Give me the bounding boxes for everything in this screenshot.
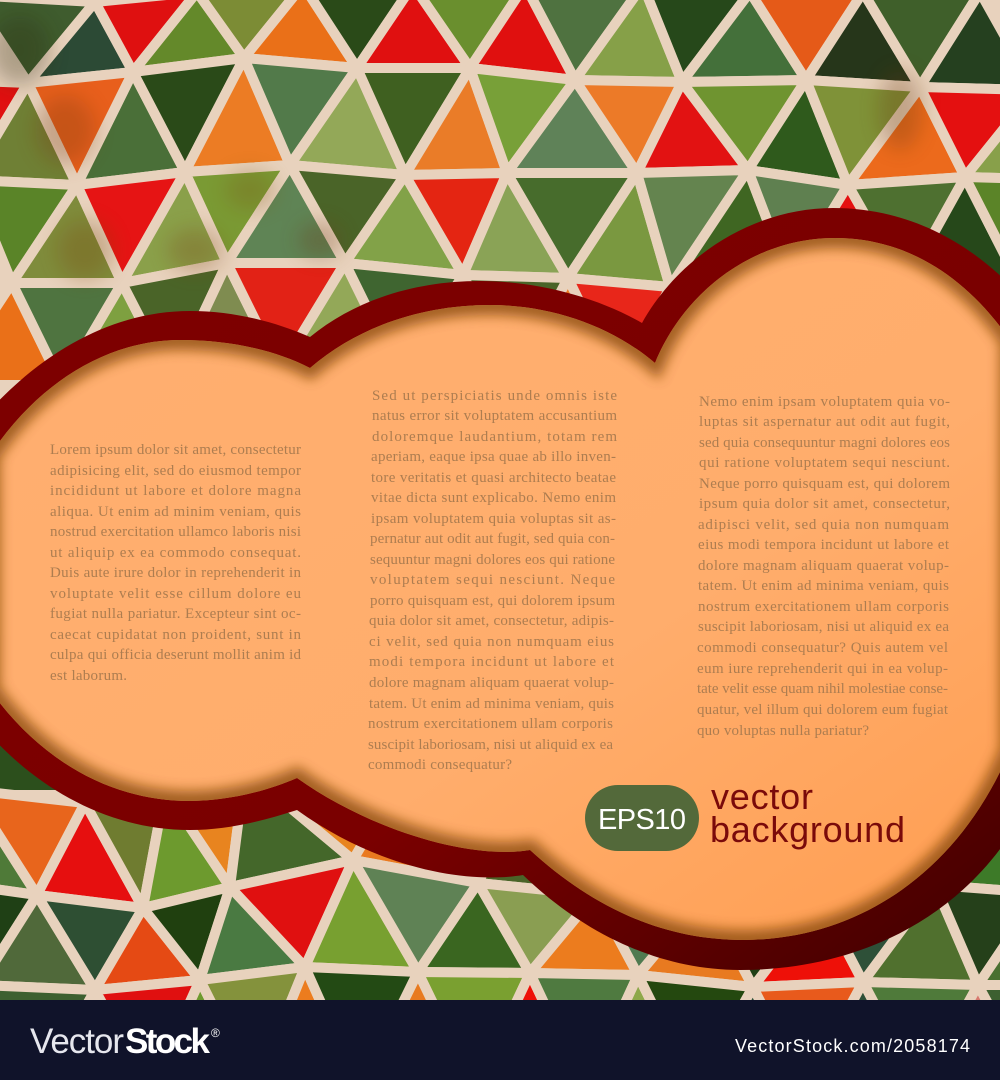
text block: right column: commodi consequatur? Quis autem vel bbox=[697, 640, 948, 656]
text block: right column: tatem. Ut enim ad minima veniam, quis bbox=[698, 578, 949, 594]
text block: middle column: commodi consequatur? bbox=[368, 757, 512, 773]
text block: left column: adipisicing elit, sed do eiusmod tempor bbox=[50, 463, 301, 479]
text block: middle column: doloremque laudantium, totam rem bbox=[372, 429, 617, 445]
text block: left column bbox=[50, 442, 302, 684]
text block: right column: nostrum exercitationem ullam corporis bbox=[698, 599, 949, 615]
text block: right column: quo voluptas nulla pariatur? bbox=[697, 723, 869, 739]
text block: middle column: natus error sit voluptatem accusantium bbox=[372, 408, 617, 424]
cloud panel: orange interior with inner shadow bbox=[0, 238, 1000, 940]
logo: VectorStock bbox=[30, 1022, 220, 1061]
text block: middle column: suscipit laboriosam, nisi ut aliquid ex ea bbox=[368, 737, 613, 753]
footer bar bbox=[0, 1000, 1000, 1080]
text block: middle column: tatem. Ut enim ad minima veniam, quis bbox=[369, 696, 614, 712]
text block: right column: Nemo enim ipsam voluptatem quia vo- bbox=[699, 394, 950, 410]
text block: middle column: nostrum exercitationem ullam corporis bbox=[368, 716, 613, 732]
text block: right column: suscipit laboriosam, nisi ut aliquid ex ea bbox=[698, 619, 949, 635]
text block: middle column: voluptatem sequi nesciunt. Neque bbox=[370, 572, 615, 588]
text block: middle column: porro quisquam est, qui dolorem ipsum bbox=[370, 593, 615, 609]
text block: left column: culpa qui officia deserunt mollit anim id bbox=[50, 647, 302, 663]
text block: right column: qui ratione voluptatem sequi nesciunt. bbox=[699, 455, 950, 471]
text block: left column: fugiat nulla pariatur. Excepteur sint oc- bbox=[50, 606, 301, 622]
text block: left column: ut aliquip ex ea commodo consequat. bbox=[50, 545, 301, 561]
text block: right column: dolore magnam aliquam quaerat volup- bbox=[698, 558, 949, 574]
text block: left column: incididunt ut labore et dolore magna bbox=[50, 483, 301, 499]
text block: right column: ipsum quia dolor sit amet, consectetur, bbox=[699, 496, 950, 512]
text block: middle column: quia dolor sit amet, consectetur, adipis- bbox=[369, 613, 614, 629]
text block: left column: voluptate velit esse cillum dolore eu bbox=[50, 586, 302, 602]
text block: left column: Lorem ipsum dolor sit amet, consectetur bbox=[50, 442, 301, 458]
text block: middle column bbox=[368, 388, 617, 773]
text block: middle column: pernatur aut odit aut fugit, sed quia con- bbox=[370, 531, 615, 547]
heading: vector background bbox=[710, 776, 905, 850]
text block: middle column: modi tempora incidunt ut labore et bbox=[369, 654, 615, 670]
text block: right column: eius modi tempora incidunt ut labore et bbox=[698, 537, 950, 553]
badge: EPS10: EPS10 bbox=[598, 804, 686, 836]
text block: middle column: ci velit, sed quia non numquam eius bbox=[369, 634, 614, 650]
bottom triangle mosaic bbox=[0, 700, 1000, 1080]
badge: EPS10 bbox=[585, 785, 699, 851]
text block: right column bbox=[697, 394, 950, 739]
text block: middle column: aperiam, eaque ipsa quae ab illo inven- bbox=[371, 449, 616, 465]
text block: left column: nostrud exercitation ullamco laboris nisi bbox=[50, 524, 301, 540]
text block: right column: eum iure reprehenderit qui in ea volup- bbox=[697, 661, 948, 677]
text block: middle column: vitae dicta sunt explicabo. Nemo enim bbox=[371, 490, 616, 506]
top triangle mosaic bbox=[0, 0, 1000, 385]
text block: right column: tate velit esse quam nihil molestiae conse- bbox=[697, 681, 948, 697]
text block: right column: sed quia consequuntur magni dolores eos bbox=[699, 435, 950, 451]
logo: VectorStock: ® bbox=[211, 1026, 220, 1040]
heading: vector background: background bbox=[710, 809, 905, 850]
logo: VectorStock: Vector bbox=[30, 1022, 124, 1061]
logo: VectorStock: Stock bbox=[125, 1022, 211, 1061]
text block: middle column: Sed ut perspiciatis unde omnis iste bbox=[372, 388, 617, 404]
text block: right column: luptas sit aspernatur aut odit aut fugit, bbox=[699, 414, 950, 430]
cloud panel: dark red border bbox=[0, 208, 1000, 970]
text block: left column: est laborum. bbox=[50, 668, 127, 684]
text block: left column: Duis aute irure dolor in reprehenderit in bbox=[50, 565, 302, 581]
text block: middle column: ipsam voluptatem quia voluptas sit as- bbox=[371, 511, 616, 527]
text block: right column: quatur, vel illum qui dolorem eum fugiat bbox=[697, 702, 949, 718]
footer: image reference: VectorStock.com/2058174 bbox=[735, 1036, 970, 1056]
text block: middle column: dolore magnam aliquam quaerat volup- bbox=[369, 675, 614, 691]
text block: left column: caecat cupidatat non proident, sunt in bbox=[50, 627, 302, 643]
text block: right column: Neque porro quisquam est, qui dolorem bbox=[699, 476, 950, 492]
text block: middle column: sequuntur magni dolores eos qui ratione bbox=[370, 552, 615, 568]
text block: left column: aliqua. Ut enim ad minim veniam, quis bbox=[50, 504, 301, 520]
text block: right column: adipisci velit, sed quia non numquam bbox=[698, 517, 949, 533]
top mosaic watercolor stains bbox=[0, 15, 922, 280]
text block: middle column: tore veritatis et quasi architecto beatae bbox=[371, 470, 616, 486]
heading: vector background: vector bbox=[711, 776, 813, 817]
